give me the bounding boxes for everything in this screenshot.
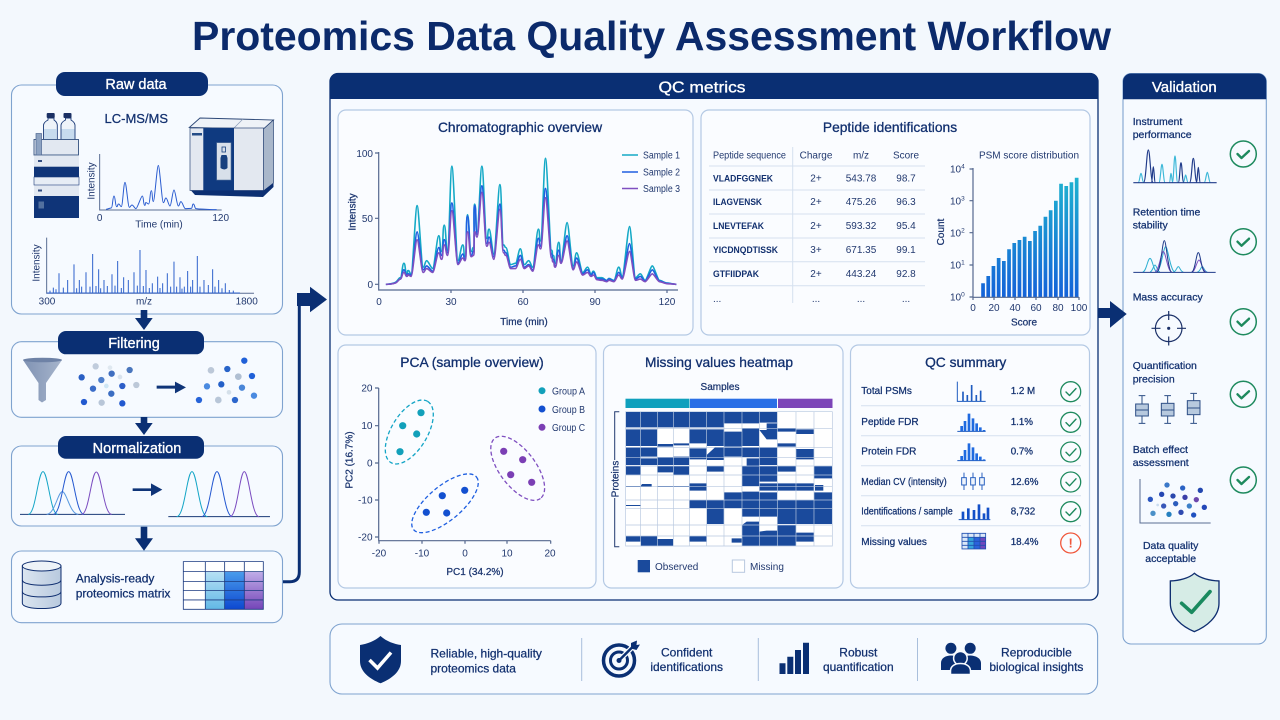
arrow: raw data to filtering [135, 310, 153, 330]
heading: QC metrics: QC metrics [658, 80, 746, 96]
item: batch effect assessment: assessment [1133, 457, 1189, 469]
table: peptide matches: 2+ [810, 174, 822, 184]
item: instrument performance [1133, 116, 1256, 183]
chart: PCA scatter: 10 [361, 421, 373, 432]
panel: PCA [338, 345, 596, 588]
row: protein FDR [861, 442, 1081, 462]
label: LC-MS/MS: LC-MS/MS [104, 111, 168, 126]
item: mass accuracy [1133, 292, 1256, 346]
chart: PSM score distribution: 3 [961, 196, 965, 202]
chart: PSM score distribution: 2 [961, 228, 965, 234]
row: missing values: 18.4% [1011, 537, 1039, 548]
chart: peaks before and after normalization [20, 472, 270, 517]
heading: Chromatographic overview [438, 120, 602, 135]
chart: PCA scatter: -20 [372, 548, 387, 560]
chart: PCA scatter: 10 [501, 548, 513, 560]
row: peptide FDR: 1.1% [1011, 417, 1033, 428]
arrow: filtering to normalization [135, 417, 153, 435]
chart: mini chromatogram: 120 [212, 213, 229, 224]
item: batch effect assessment: Batch effect [1133, 444, 1188, 456]
chart: PSM score distribution: 40 [1009, 303, 1021, 314]
heading: validation: Validation [1152, 79, 1217, 96]
axis label: proteins: Proteins [610, 461, 622, 497]
chart: PSM score distribution: 10 [950, 196, 961, 208]
row: identifications per sample [861, 502, 1081, 522]
legend: samples: Sample 1 [643, 150, 680, 162]
panel: QC metrics [330, 74, 1098, 600]
chart: mini chromatogram: 0 [97, 213, 103, 224]
chart: PSM score distribution: Score [1011, 318, 1037, 328]
table: peptide matches: 593.32 [846, 221, 877, 232]
chart: PSM score distribution: 4 [961, 164, 965, 170]
table: peptide matches: 3+ [810, 245, 822, 256]
chart: mass spectrum: 300 [39, 296, 56, 308]
panel: analysis-ready matrix [12, 551, 282, 623]
row: protein FDR: 0.7% [1011, 446, 1033, 457]
table: peptide matches: VLADFGGNEK [713, 174, 773, 184]
label: samples: Samples [701, 382, 739, 393]
heading: normalization: Normalization [93, 441, 181, 457]
legend: groups [538, 386, 585, 434]
chart: overlaid chromatograms: 60 [517, 297, 529, 308]
dots: unfiltered and filtered features [78, 357, 257, 406]
table: peptide matches: m/z [853, 150, 869, 162]
outcome: confident identifications: Confident [661, 646, 713, 660]
table: peptide matches: ILAGVENSK [713, 197, 762, 208]
panel: QC summary [850, 345, 1090, 588]
chart: PSM score distribution: 20 [988, 303, 1000, 314]
chart: PSM score distribution: PSM score distribution [979, 150, 1079, 162]
table: peptide matches: 2+ [810, 197, 822, 208]
table: peptide matches: Charge [800, 150, 833, 162]
chart: mass spectrum: 1800 [236, 296, 258, 308]
chart: PSM score distribution [936, 150, 1088, 328]
chart: overlaid chromatograms: 50 [362, 214, 373, 225]
item: instrument performance: Instrument [1133, 116, 1182, 128]
chart: PSM score distribution: 10 [950, 164, 961, 176]
row: identifications per sample: 8,732 [1011, 507, 1035, 518]
icon: LC instrument stack [34, 113, 79, 218]
table: peptide matches: 543.78 [846, 174, 877, 184]
table: peptide matches: 95.4 [896, 221, 916, 232]
chart: PSM score distribution: 1 [961, 260, 965, 266]
heading: filtering [58, 331, 204, 354]
chart: overlaid chromatograms: 0 [367, 280, 373, 291]
heading: QC metrics [330, 74, 1098, 99]
legend: observed and missing: Observed [655, 562, 698, 573]
outcome: reliable data: proteomics data [430, 661, 516, 675]
chart: PCA scatter: -10 [358, 496, 373, 506]
verdict: data quality acceptable: acceptable [1145, 553, 1196, 565]
row: median CV [861, 472, 1081, 492]
panel: peptide identifications [701, 110, 1090, 335]
heading: Peptide identifications [823, 120, 957, 135]
item: mass accuracy: Mass accuracy [1133, 292, 1203, 304]
table: peptide matches: 99.1 [896, 245, 916, 256]
chart: PCA scatter: -20 [358, 532, 373, 544]
icon: mass spectrometer [189, 118, 274, 197]
outcome: robust quantification: Robust [839, 646, 878, 660]
panel: validation [1123, 74, 1266, 644]
sample group colour bar [626, 399, 832, 408]
table: peptide matches: 2+ [810, 269, 822, 280]
chart: mass spectrum: Intensity [32, 244, 42, 282]
chart: PSM score distribution: 0 [961, 292, 965, 298]
item: quantification precision: precision [1133, 373, 1175, 385]
heading: validation [1123, 74, 1266, 99]
chart: overlaid chromatograms: 100 [356, 149, 373, 160]
row: peptide FDR: Peptide FDR [861, 417, 919, 428]
outcome: confident identifications [604, 640, 723, 676]
heading: Missing values heatmap [645, 355, 793, 370]
table: peptide matches: YICDNQDTISSK [713, 245, 778, 256]
text: analysis-ready proteomics matrix: proteomics matrix [76, 586, 170, 600]
arrow: QC metrics to validation [1098, 301, 1127, 328]
chart: PCA scatter: PC2 (16.7%) [344, 431, 356, 489]
item: retention time stability [1133, 206, 1256, 272]
outcome: reproducible insights [941, 643, 1083, 674]
panel: missing values heatmap [604, 345, 843, 588]
chart: PCA scatter: 20 [361, 384, 373, 394]
icon: matrix table [183, 562, 263, 609]
outcome: reproducible insights: Reproducible [1001, 646, 1072, 660]
text: analysis-ready proteomics matrix [76, 572, 170, 600]
panel: raw data [12, 72, 282, 314]
chart: heatmap grid [626, 412, 832, 546]
panel: chromatographic overview [338, 110, 693, 335]
icon: database [22, 561, 61, 609]
row: total PSMs: Total PSMs [861, 386, 912, 397]
row: identifications per sample: Identifications / sample [861, 507, 953, 518]
table: peptide matches: LNEVTEFAK [713, 221, 764, 232]
item: quantification precision [1133, 360, 1256, 423]
row: median CV: 12.6% [1011, 477, 1039, 488]
text: analysis-ready proteomics matrix: Analysis-ready [76, 572, 154, 586]
chart: PCA scatter [344, 384, 556, 578]
row: protein FDR: Protein FDR [861, 446, 916, 457]
chart: PSM score distribution: 10 [950, 260, 961, 272]
table: peptide matches: GTFIIDPAK [713, 269, 759, 280]
chart: overlaid chromatograms: 0 [376, 297, 382, 308]
chart: overlaid chromatograms: Time (min) [500, 317, 548, 328]
legend: observed and missing: Missing [750, 562, 784, 573]
table: peptide matches: 2+ [810, 221, 822, 232]
chart: overlaid chromatograms [348, 149, 678, 328]
chart: PSM score distribution: 10 [950, 292, 961, 304]
legend: samples: Sample 3 [643, 184, 680, 195]
chart: overlaid chromatograms: 30 [445, 297, 457, 308]
item: instrument performance: performance [1133, 129, 1192, 141]
table: peptide matches: 96.3 [896, 197, 916, 208]
legend: groups: Group A [552, 386, 585, 398]
item: quantification precision: Quantification [1133, 360, 1197, 372]
panel: normalization [12, 436, 282, 526]
chart: PSM score distribution: 100 [1071, 303, 1088, 314]
title: Proteomics Data Quality Assessment Workflow [192, 13, 1111, 59]
table: peptide matches: 475.26 [846, 197, 877, 208]
outcome: confident identifications: identifications [650, 660, 723, 674]
legend: samples [622, 150, 680, 195]
table: peptide matches: Peptide sequence [713, 150, 786, 162]
row: total PSMs [861, 382, 1081, 402]
chart: mass spectrum: m/z [136, 296, 152, 308]
table: peptide matches: 98.7 [896, 174, 916, 184]
legend: groups: Group B [552, 405, 585, 416]
row: missing values: Missing values [861, 537, 927, 548]
chart: PCA scatter: 0 [462, 548, 468, 560]
chart: mini chromatogram: Intensity [86, 162, 98, 200]
row: missing values [861, 533, 1081, 553]
chart: PSM score distribution: 80 [1052, 303, 1064, 314]
row: median CV: Median CV (intensity) [861, 477, 947, 488]
chart: mini chromatogram [86, 154, 229, 230]
table: peptide matches: 671.35 [846, 245, 877, 256]
chart: overlaid chromatograms: 120 [659, 297, 676, 308]
chart: overlaid chromatograms: Intensity [348, 193, 358, 231]
arrow: normalization to matrix [135, 527, 153, 551]
arrow: pipeline connector into QC metrics [283, 287, 327, 582]
axis label: proteins [610, 412, 622, 547]
item: retention time stability: Retention time [1133, 206, 1201, 218]
table: peptide matches: ... [812, 294, 820, 305]
table: peptide matches [709, 147, 925, 305]
row: missing values: ! [1069, 536, 1073, 550]
panel: filtering [12, 331, 282, 417]
heading: raw data: Raw data [105, 77, 168, 93]
table: peptide matches: 92.8 [896, 269, 916, 280]
legend: samples: Sample 2 [643, 168, 680, 178]
outcome: robust quantification: quantification [823, 660, 894, 674]
heading: filtering: Filtering [108, 336, 160, 352]
heading: raw data [56, 72, 208, 96]
outcome: robust quantification [780, 643, 894, 674]
outcome: reliable data: Reliable, high-quality [430, 646, 542, 660]
heading: QC summary [925, 355, 1006, 370]
verdict: data quality acceptable: Data quality [1143, 540, 1199, 552]
legend: observed and missing [638, 560, 784, 573]
panel: outcomes band [330, 624, 1098, 694]
chart: PSM score distribution: 60 [1030, 303, 1042, 314]
item: batch effect assessment [1133, 444, 1256, 523]
table: peptide matches: 443.24 [846, 269, 877, 280]
table: peptide matches: ... [713, 294, 721, 305]
chart: PCA scatter: PC1 (34.2%) [446, 567, 504, 578]
chart: overlaid chromatograms: 90 [589, 297, 601, 308]
icon: funnel [23, 358, 62, 402]
row: total PSMs: 1.2 M [1011, 386, 1035, 397]
chart: PCA scatter: 20 [544, 548, 556, 560]
outcome: reproducible insights: biological insights [989, 660, 1083, 674]
table: peptide matches: Score [893, 150, 919, 162]
chart: PSM score distribution: Count [936, 218, 947, 245]
chart: PSM score distribution: 0 [970, 303, 976, 314]
chart: mini chromatogram: Time (min) [135, 220, 183, 230]
chart: PCA scatter: 0 [367, 458, 373, 470]
table: peptide matches: ... [902, 294, 910, 305]
chart: mass spectrum [32, 238, 258, 308]
item: retention time stability: stability [1133, 219, 1168, 231]
heading: PCA (sample overview) [400, 355, 544, 370]
heading: normalization [58, 436, 204, 459]
outcome: reliable data [360, 636, 542, 683]
chart: PCA scatter: -10 [415, 548, 430, 560]
row: peptide FDR [861, 412, 1081, 432]
verdict: data quality acceptable [1143, 540, 1219, 632]
legend: groups: Group C [552, 423, 585, 434]
chart: PSM score distribution: 10 [950, 228, 961, 240]
table: peptide matches: ... [857, 294, 865, 305]
